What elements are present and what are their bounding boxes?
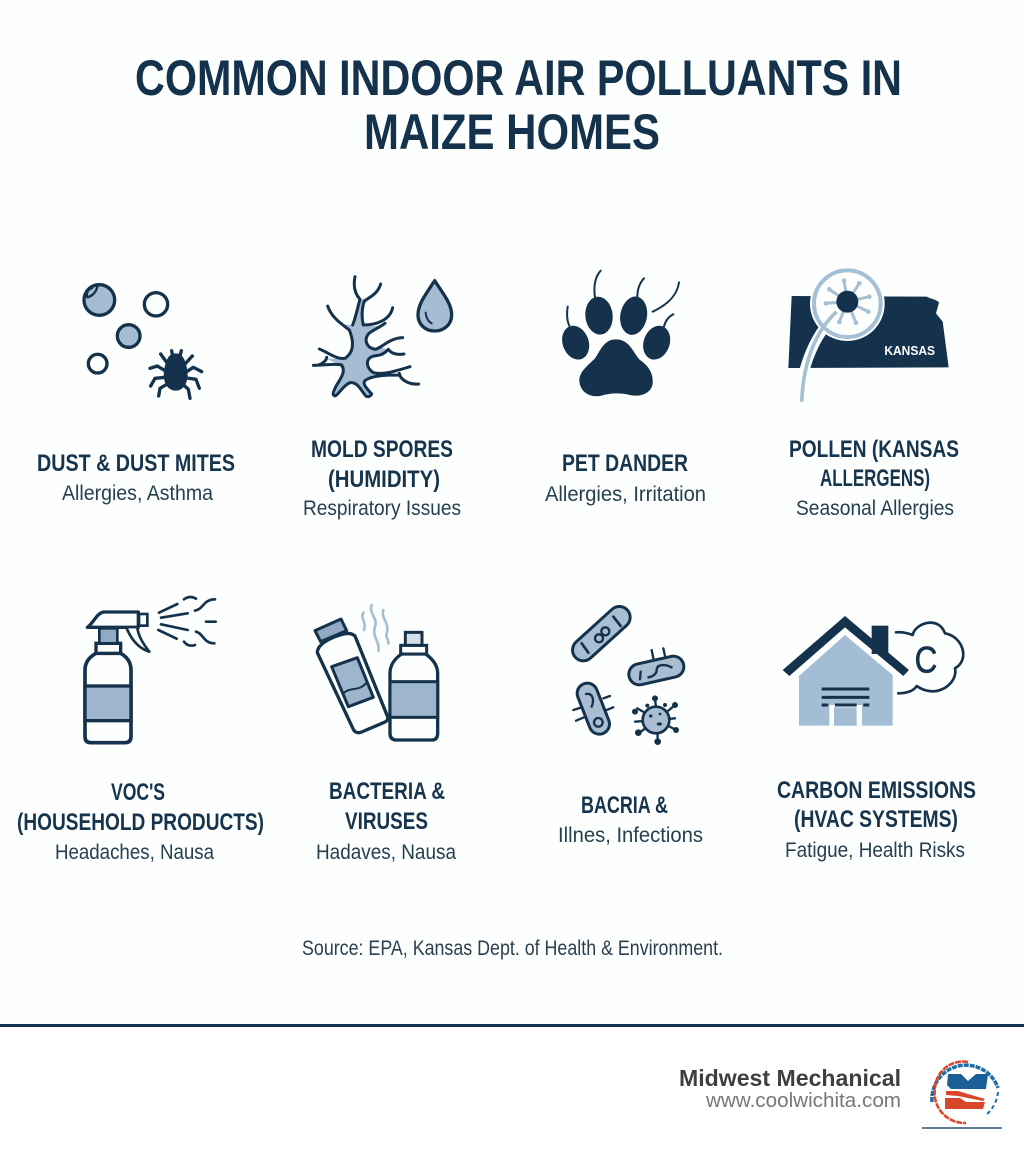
- heading: carbon emissions: [777, 777, 976, 833]
- icon: cleaning bottles with vapor: [315, 605, 438, 740]
- logo: [922, 1062, 1002, 1129]
- heading: bacria: BACRIA &: [581, 792, 668, 819]
- text: dust effects: Allergies, Asthma: [62, 482, 213, 505]
- heading: pet dander: PET DANDER: [562, 450, 688, 477]
- heading: VOCs: VOC'S: [111, 779, 165, 806]
- icon: mold and water drop: [313, 277, 452, 397]
- source note: Source: EPA, Kansas Dept. of Health & Environment.: [302, 937, 723, 960]
- icon: bacteria and virus: [573, 617, 679, 745]
- panel: VOCs: [17, 597, 264, 864]
- footer website: www.coolwichita.com: [705, 1090, 901, 1112]
- text: pet dander effects: Allergies, Irritation: [545, 483, 706, 506]
- panel: bacteria and viruses: [315, 605, 456, 864]
- text: bacria effects: Illnes, Infections: [558, 824, 703, 847]
- panel: mold spores: [303, 277, 461, 520]
- heading: pollen: ALLERGENS): [820, 465, 930, 492]
- heading: carbon emissions: (HVAC SYSTEMS): [794, 806, 958, 833]
- icon: house with carbon cloud: [783, 616, 963, 726]
- title: MAIZE HOMES: [364, 104, 660, 160]
- heading: bacteria and viruses: BACTERIA &: [329, 778, 445, 805]
- heading: dust and dust mites: DUST & DUST MITES: [37, 450, 235, 477]
- icon: Kansas map with dandelion: [788, 266, 949, 402]
- text: mold effects: Respiratory Issues: [303, 497, 461, 520]
- panel: dust and dust mites: [37, 285, 235, 505]
- heading: pollen: POLLEN (KANSAS: [789, 436, 959, 463]
- heading: bacteria and viruses: VIRUSES: [345, 808, 428, 835]
- panel: pet dander: [545, 271, 706, 506]
- icon: spray bottle: [85, 597, 216, 743]
- title: [135, 50, 902, 160]
- text: carbon effects: Fatigue, Health Risks: [785, 839, 965, 862]
- heading: mold spores: MOLD SPORES: [311, 436, 453, 463]
- icon: dust particles and mite: [84, 285, 202, 398]
- footer brand name: Midwest Mechanical: [679, 1065, 901, 1091]
- text: bacteria effects: Hadaves, Nausa: [316, 841, 456, 864]
- panel: pollen: [788, 266, 959, 520]
- heading: mold spores: (HUMIDITY): [328, 466, 440, 493]
- icon: Kansas map with dandelion: KANSAS: [884, 343, 935, 358]
- text: pollen effects: Seasonal Allergies: [796, 497, 954, 520]
- heading: VOCs: (HOUSEHOLD PRODUCTS): [17, 809, 264, 836]
- heading: bacteria and viruses: [329, 778, 445, 835]
- icon: house with carbon cloud: C: [915, 638, 937, 680]
- heading: VOCs: [17, 779, 264, 836]
- panel: bacria: [558, 617, 703, 847]
- text: VOC effects: Headaches, Nausa: [55, 841, 214, 864]
- icon: paw print: [558, 271, 679, 396]
- heading: mold spores: [311, 436, 453, 493]
- heading: carbon emissions: CARBON EMISSIONS: [777, 777, 976, 804]
- heading: pollen: [789, 436, 959, 492]
- panel: carbon emissions: [777, 616, 976, 862]
